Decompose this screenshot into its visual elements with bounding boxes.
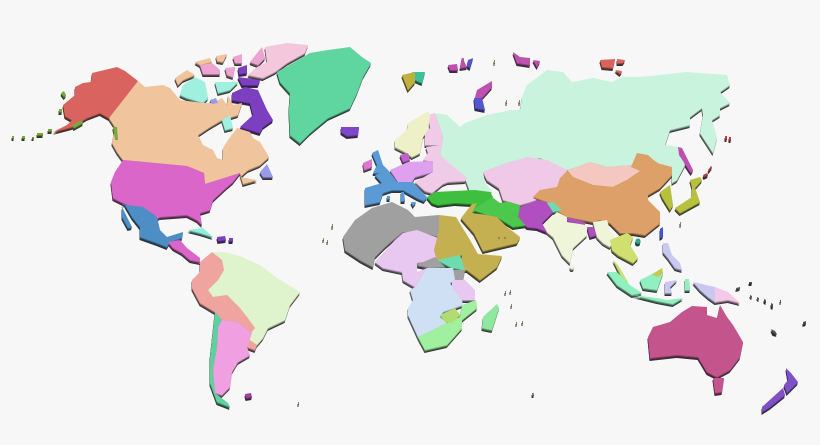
Hispaniola [217, 236, 226, 241]
region: South America [192, 252, 300, 407]
region: Russia [435, 70, 731, 192]
Sri Lanka [570, 265, 574, 269]
Nepal [567, 217, 585, 225]
New Zealand North Island [784, 368, 798, 393]
Philippines [663, 243, 682, 270]
Hainan [636, 238, 640, 244]
Aleutian islands [12, 91, 83, 138]
New Siberian Islands [600, 59, 625, 74]
Arabian Peninsula [461, 203, 520, 251]
Alaska [53, 67, 138, 132]
Arctic island, teal [215, 82, 238, 93]
Congo and Angola [408, 268, 463, 337]
Uruguay [247, 338, 257, 350]
Papua New Guinea [715, 287, 740, 303]
Alaska panhandle islands [113, 127, 118, 140]
Banks Island [175, 70, 195, 85]
Ireland [363, 159, 372, 170]
Indochina [610, 233, 638, 263]
United Kingdom [372, 150, 388, 173]
Korea [660, 185, 673, 210]
Franz Josef Land [448, 57, 467, 70]
South Sudan [437, 255, 465, 270]
Devon Island [238, 77, 260, 85]
Java and Lesser Sunda Islands [633, 295, 683, 304]
Puerto Rico [229, 238, 233, 241]
Kenya gray region [452, 270, 465, 280]
Arctic island, pink 3 [233, 54, 242, 63]
Central America [168, 240, 200, 262]
West and Central Africa [375, 230, 438, 287]
Chile [210, 312, 230, 407]
Tasmania [713, 378, 724, 393]
Svalbard olive [402, 72, 415, 90]
Sumatra [607, 272, 642, 295]
Madagascar [482, 304, 499, 330]
Mexico [121, 204, 183, 247]
Central Asia [483, 157, 567, 205]
Balearic Islands [387, 196, 390, 199]
Western Europe [365, 170, 427, 205]
Arctic island, orange 2 [216, 54, 227, 62]
Central African gray region [416, 257, 445, 268]
Victoria Island [180, 77, 208, 103]
Tanzania [452, 280, 475, 300]
Newfoundland [260, 164, 273, 177]
Cuba [188, 228, 213, 237]
Southampton Island [222, 115, 233, 130]
Taiwan [660, 227, 663, 238]
region: North America [12, 43, 308, 262]
Brazil [208, 252, 300, 345]
Maluku Islands [685, 279, 690, 290]
Arctic island, orange [195, 58, 212, 65]
Afghanistan and Pakistan [518, 200, 553, 232]
Kuril Islands [703, 136, 731, 177]
Bangladesh [587, 227, 597, 237]
region: Arctic islands of Eurasia [402, 52, 625, 110]
Sulawesi [665, 280, 677, 293]
region: Southeast Asia and Oceania [298, 58, 806, 412]
Arctic island, pink [200, 63, 220, 74]
Malay Peninsula [613, 260, 628, 282]
Egypt, Sudan and Horn of Africa [434, 215, 502, 280]
United States [111, 160, 240, 225]
Eastern Europe [415, 113, 467, 193]
region: Middle East and Asia [427, 153, 702, 269]
New Zealand South Island [762, 388, 785, 412]
Tajikistan [547, 202, 562, 212]
small purple island [238, 65, 247, 74]
Severnaya Zemlya [513, 52, 540, 67]
China [533, 153, 672, 235]
King William Island [210, 98, 218, 104]
Svalbard green [412, 72, 425, 83]
Axel Heiberg Island [250, 47, 265, 65]
Southern Africa [418, 300, 477, 350]
Australia [648, 305, 743, 377]
Western New Guinea [693, 282, 715, 302]
Novaya Zemlya south [474, 98, 485, 110]
Iceland [341, 127, 359, 136]
Arctic island, pink 2 [225, 67, 235, 77]
Greenland [277, 47, 371, 143]
Central Europe [390, 161, 433, 182]
Ellesmere Island [248, 43, 308, 78]
Baja California [122, 207, 132, 228]
Zimbabwe [440, 308, 460, 323]
region: Africa [343, 202, 502, 350]
Denmark [400, 153, 410, 162]
Sardinia and Corsica [401, 192, 405, 201]
Pacific small islands [736, 282, 806, 334]
Borneo [640, 268, 663, 290]
Franz Josef Land blue [467, 58, 473, 68]
Japan [675, 177, 702, 213]
Atlantic and Indian Ocean small islands [298, 58, 681, 404]
Baffin Island [232, 87, 273, 133]
Sicily [411, 202, 416, 206]
India [543, 212, 587, 263]
region: Europe [363, 111, 467, 206]
Novaya Zemlya north [475, 81, 492, 98]
North Africa [343, 202, 439, 267]
Mongolia [567, 162, 640, 187]
North Borneo [652, 268, 663, 277]
Sakhalin [678, 147, 693, 173]
Andean countries [192, 252, 255, 333]
Myanmar [593, 220, 615, 247]
Canada [109, 81, 269, 184]
Argentina [213, 320, 252, 395]
Turkey and Caucasus [427, 190, 493, 213]
Falkland Islands [245, 393, 252, 398]
Scandinavia [395, 111, 430, 157]
Iran [473, 197, 527, 227]
Russia mainland [435, 70, 730, 192]
